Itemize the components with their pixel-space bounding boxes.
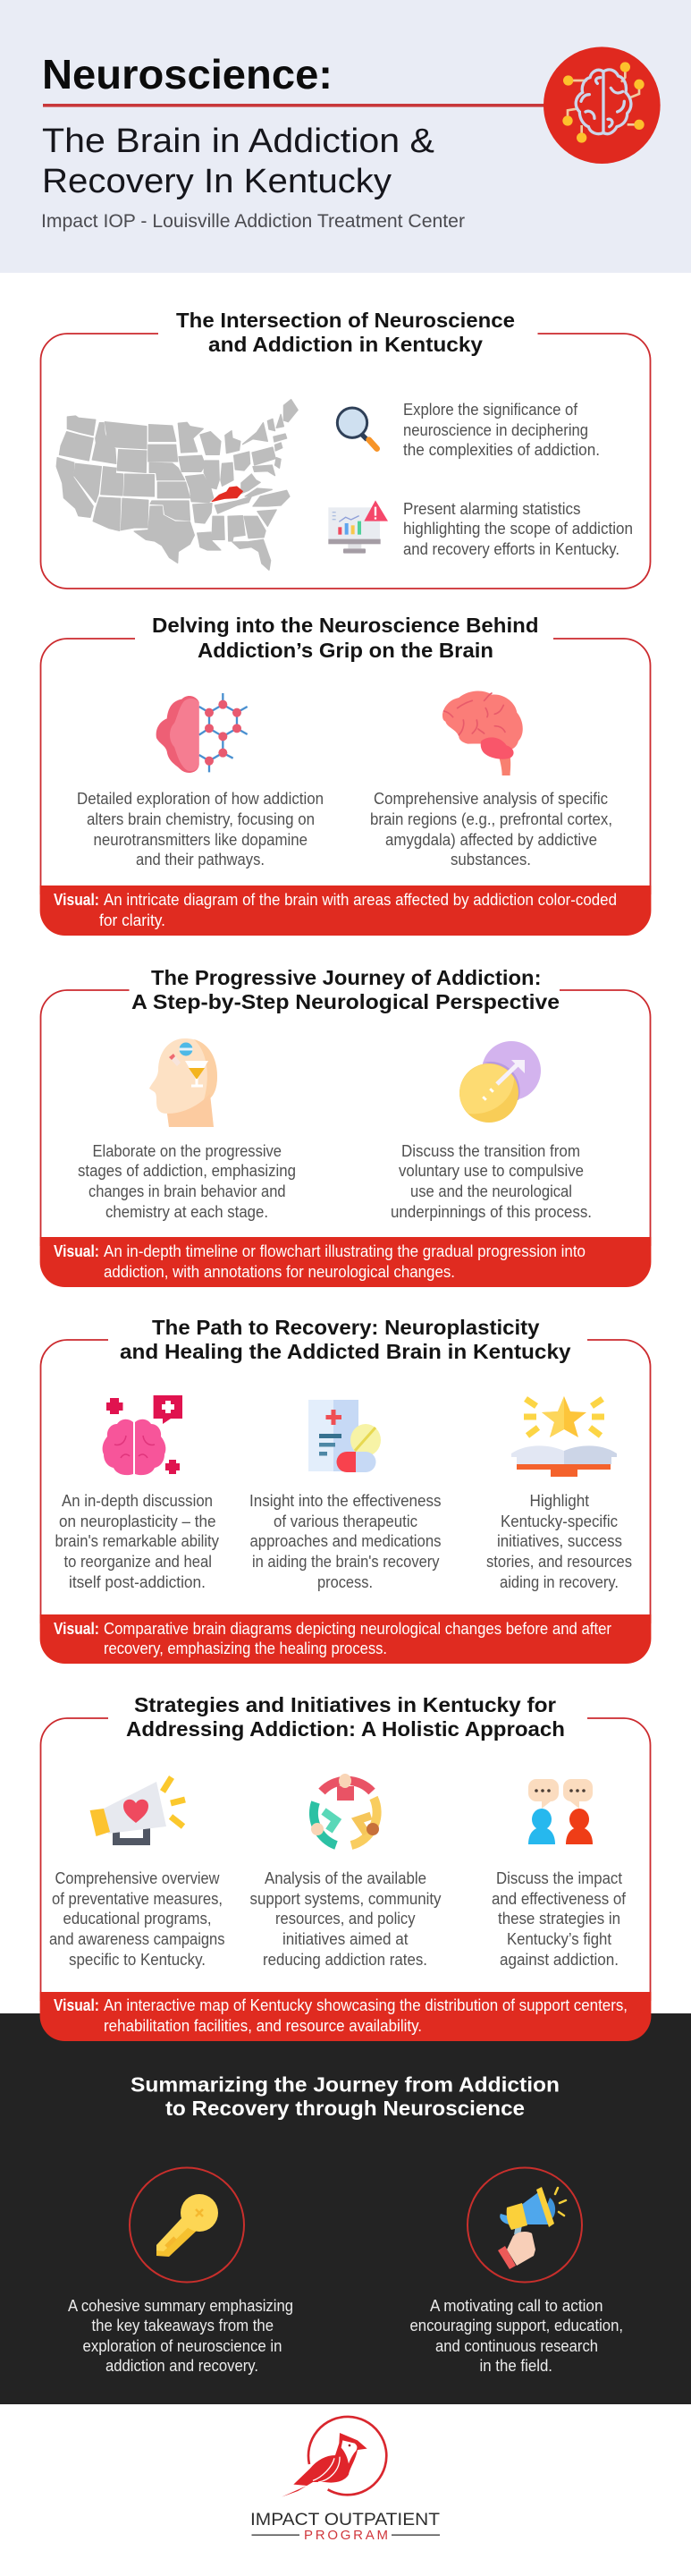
text: brain chemistry: alters brain chemistry, focusing on <box>87 809 315 828</box>
heading: and Healing the Addicted Brain in Kentucky <box>120 1340 571 1363</box>
text: Kentucky initiatives <box>486 1491 632 1591</box>
callout: visual note: rehabilitation facilities, and resource availability. <box>104 2016 422 2035</box>
heading: Delving into the Neuroscience Behind <box>152 614 538 637</box>
text: preventative measures: educational programs, <box>63 1909 211 1928</box>
icon: magnifying glass <box>337 408 377 449</box>
title: Neuroscience: Neuroscience: <box>42 51 333 97</box>
text: therapeutic approaches: of various therapeutic <box>274 1512 417 1530</box>
text: support systems: support systems, community <box>250 1889 442 1908</box>
text: Kentucky initiatives: Highlight <box>529 1491 589 1510</box>
text: preventative measures <box>49 1868 225 1969</box>
icon: brain circuit badge <box>544 47 661 164</box>
text: impact of strategies: these strategies in <box>498 1909 620 1928</box>
text: preventative measures: and awareness campaigns <box>49 1929 225 1948</box>
heading: Addiction’s Grip on the Brain <box>198 639 493 662</box>
text: preventative measures: Comprehensive overview <box>55 1868 220 1887</box>
icon: key in ring <box>130 2168 244 2283</box>
program label: PROGRAM <box>304 2528 388 2543</box>
text: brain regions: Comprehensive analysis of specific <box>374 789 608 808</box>
panel frame <box>41 334 651 589</box>
icon: star and open book <box>511 1396 617 1477</box>
text: statistics <box>403 499 633 558</box>
callout: visual note: Visual: <box>54 1619 99 1638</box>
heading: Summarizing the Journey from Addiction <box>131 2073 560 2097</box>
panel frame <box>41 1340 651 1623</box>
callout: visual note <box>40 1992 651 2041</box>
text: explore: Explore the significance of <box>403 400 578 419</box>
text: brain chemistry: neurotransmitters like dopamine <box>93 830 308 849</box>
panel: header <box>0 0 691 273</box>
callout: visual note: An interactive map of Kentucky showcasing the distribution of support centers, <box>104 1996 628 2014</box>
text: compulsive use: voluntary use to compulsive <box>399 1161 584 1180</box>
text: impact of strategies: Discuss the impact <box>496 1868 622 1887</box>
callout: visual note: Visual: <box>54 890 99 909</box>
text: brain regions: brain regions (e.g., prefrontal cortex, <box>370 809 612 828</box>
icon: hand holding megaphone in ring <box>468 2168 582 2283</box>
icon: head with pills and drink <box>149 1038 217 1127</box>
panel: path to recovery <box>40 1316 651 1664</box>
text: neuroplasticity: itself post-addiction. <box>69 1572 206 1591</box>
text: explore <box>403 400 600 459</box>
text: brain chemistry <box>77 789 324 869</box>
callout: visual note <box>40 1614 651 1664</box>
callout: visual note: addiction, with annotations for neurological changes. <box>104 1262 455 1281</box>
icon: support circle of people <box>311 1774 379 1845</box>
panel: progressive journey of addiction <box>40 966 651 1287</box>
text: progressive stages: chemistry at each stage. <box>105 1202 268 1221</box>
text: support systems: resources, and policy <box>275 1909 416 1928</box>
text: Kentucky initiatives: initiatives, success <box>497 1531 622 1550</box>
logo: Impact Outpatient Program <box>250 2417 440 2543</box>
text: progressive stages: changes in brain behavior and <box>88 1182 286 1200</box>
icon: statistics monitor with alert <box>328 500 388 554</box>
heading: Strategies and Initiatives in Kentucky for <box>134 1693 556 1716</box>
heading: to Recovery through Neuroscience <box>165 2097 525 2120</box>
icon: document and medication <box>308 1400 381 1472</box>
heading: A Step-by-Step Neurological Perspective <box>131 990 560 1013</box>
text: impact of strategies: Kentucky’s fight <box>507 1929 611 1948</box>
icon: brain with highlighted region <box>442 691 523 775</box>
heading: Addressing Addiction: A Holistic Approach <box>126 1717 565 1741</box>
text: preventative measures: specific to Kentucky. <box>69 1950 206 1969</box>
text: progressive stages <box>78 1141 296 1221</box>
heading <box>126 1693 565 1741</box>
text: cohesive summary: exploration of neuroscience in <box>82 2336 282 2355</box>
icon: transition circles with arrow <box>459 1041 541 1123</box>
callout: visual note: An intricate diagram of the brain with areas affected by addiction color-coded <box>104 890 617 909</box>
heading: The Progressive Journey of Addiction: <box>151 966 542 989</box>
text: support systems <box>250 1868 442 1969</box>
text: support systems: Analysis of the available <box>265 1868 426 1887</box>
text: compulsive use: underpinnings of this process. <box>391 1202 592 1221</box>
heading <box>176 309 515 356</box>
text: neuroplasticity: An in-depth discussion <box>62 1491 213 1510</box>
text: therapeutic approaches <box>249 1491 442 1591</box>
text: statistics: and recovery efforts in Kentucky. <box>403 539 619 558</box>
text: progressive stages: stages of addiction, emphasizing <box>78 1161 296 1180</box>
title rule <box>43 104 548 107</box>
callout: visual note <box>40 886 651 936</box>
subtitle: Recovery In Kentucky <box>42 163 392 200</box>
heading <box>131 966 560 1013</box>
panel frame <box>41 639 651 894</box>
callout: visual note <box>40 1237 651 1287</box>
icon: healing pink brain <box>103 1395 182 1475</box>
panel: strategies and initiatives <box>40 1693 651 2041</box>
text: cohesive summary: A cohesive summary emphasizing <box>68 2296 293 2315</box>
text: support systems: reducing addiction rates. <box>263 1950 427 1969</box>
callout: visual note: Visual: <box>54 1996 99 2014</box>
text: neuroplasticity: brain's remarkable ability <box>55 1531 220 1550</box>
organisation line: Impact IOP - Louisville Addiction Treatment Center <box>41 211 465 232</box>
text: brain regions: substances. <box>451 850 531 869</box>
map: United States with Kentucky highlighted <box>56 400 298 570</box>
text: brain chemistry: Detailed exploration of how addiction <box>77 789 324 808</box>
text: therapeutic approaches: approaches and medications <box>250 1531 442 1550</box>
text: therapeutic approaches: Insight into the effectiveness <box>249 1491 442 1510</box>
text: compulsive use: Discuss the transition from <box>401 1141 580 1160</box>
heading <box>120 1316 571 1363</box>
icon: megaphone with heart <box>90 1777 185 1845</box>
text: call to action: A motivating call to action <box>430 2296 603 2315</box>
callout: visual note: An in-depth timeline or flowchart illustrating the gradual progression into <box>104 1241 586 1260</box>
panel: intersection of neuroscience and addiction <box>41 309 651 589</box>
text: explore: neuroscience in deciphering <box>403 420 588 439</box>
panel: neuroscience behind addiction <box>40 614 651 936</box>
text: call to action: and continuous research <box>435 2336 598 2355</box>
callout: visual note: Comparative brain diagrams depicting neurological changes before and after <box>104 1619 611 1638</box>
wordmark: IMPACT OUTPATIENT <box>250 2510 440 2529</box>
text: impact of strategies: against addiction. <box>500 1950 619 1969</box>
panel frame <box>41 1718 651 2001</box>
heading: The Intersection of Neuroscience <box>176 309 515 332</box>
text: cohesive summary: addiction and recovery. <box>105 2356 258 2375</box>
text: cohesive summary <box>68 2296 293 2375</box>
text: statistics: highlighting the scope of addiction <box>403 519 633 538</box>
text: Kentucky initiatives: aiding in recovery. <box>500 1572 619 1591</box>
text: neuroplasticity: to reorganize and heal <box>64 1552 212 1571</box>
text: impact of strategies <box>492 1868 627 1969</box>
text: call to action: in the field. <box>479 2356 552 2375</box>
text: therapeutic approaches: process. <box>317 1572 373 1591</box>
heading <box>131 2073 560 2120</box>
text: statistics: Present alarming statistics <box>403 499 581 518</box>
heading: and Addiction in Kentucky <box>208 333 483 356</box>
text: neuroplasticity <box>55 1491 220 1591</box>
text: preventative measures: of preventative measures, <box>52 1889 223 1908</box>
text: call to action <box>409 2296 623 2375</box>
panel: summary background <box>0 2013 691 2404</box>
text: brain regions: amygdala) affected by addictive <box>385 830 597 849</box>
text: compulsive use <box>391 1141 592 1221</box>
text: brain regions <box>370 789 612 869</box>
text: Kentucky initiatives: stories, and resources <box>486 1552 632 1571</box>
panel frame <box>41 990 651 1246</box>
subtitle <box>42 123 434 200</box>
text: explore: the complexities of addiction. <box>403 440 600 459</box>
icon: cardinal in circle <box>282 2417 386 2497</box>
text: support systems: initiatives aimed at <box>282 1929 408 1948</box>
text: brain chemistry: and their pathways. <box>136 850 265 869</box>
text: call to action: encouraging support, education, <box>409 2316 623 2334</box>
heading <box>152 614 538 662</box>
text: therapeutic approaches: in aiding the brain's recovery <box>252 1552 440 1571</box>
callout: visual note: Visual: <box>54 1241 99 1260</box>
text: cohesive summary: the key takeaways from the <box>91 2316 274 2334</box>
callout: visual note: for clarity. <box>99 911 165 929</box>
subtitle: The Brain in Addiction & <box>42 123 434 160</box>
heading: The Path to Recovery: Neuroplasticity <box>152 1316 540 1339</box>
callout: visual note: recovery, emphasizing the healing process. <box>104 1639 387 1657</box>
text: impact of strategies: and effectiveness of <box>492 1889 627 1908</box>
icon: two people talking <box>528 1779 593 1844</box>
text: neuroplasticity: on neuroplasticity – the <box>59 1512 216 1530</box>
text: progressive stages: Elaborate on the progressive <box>93 1141 282 1160</box>
text: Kentucky initiatives: Kentucky-specific <box>501 1512 618 1530</box>
text: compulsive use: use and the neurological <box>410 1182 572 1200</box>
panel: summary <box>68 2073 623 2375</box>
icon: half brain with molecule <box>156 693 248 773</box>
